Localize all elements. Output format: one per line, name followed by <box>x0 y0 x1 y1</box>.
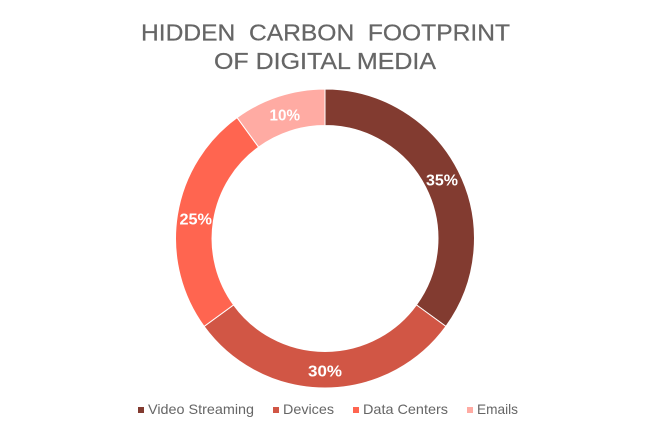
segment: Emails 10% <box>237 89 325 147</box>
title: OF DIGITAL MEDIA <box>214 48 437 74</box>
data labels: 35% <box>426 172 458 190</box>
segment: Video Streaming 35% <box>325 89 474 326</box>
title: HIDDEN CARBON FOOTPRINT <box>141 20 510 46</box>
data labels: 30% <box>308 364 342 380</box>
legend <box>138 401 518 417</box>
donut chart <box>176 89 474 388</box>
title <box>141 20 510 74</box>
legend item: Video Streaming: Video Streaming <box>148 401 254 417</box>
legend item: Emails: Emails <box>477 401 518 417</box>
data labels: 10% <box>270 108 300 124</box>
segment: Devices 30% <box>204 305 446 388</box>
segment: Data Centers 25% <box>176 118 259 326</box>
data labels: 25% <box>180 212 212 228</box>
data labels <box>180 108 458 380</box>
legend item: Devices: Devices <box>283 401 334 417</box>
legend item: Data Centers: Data Centers <box>363 401 448 417</box>
